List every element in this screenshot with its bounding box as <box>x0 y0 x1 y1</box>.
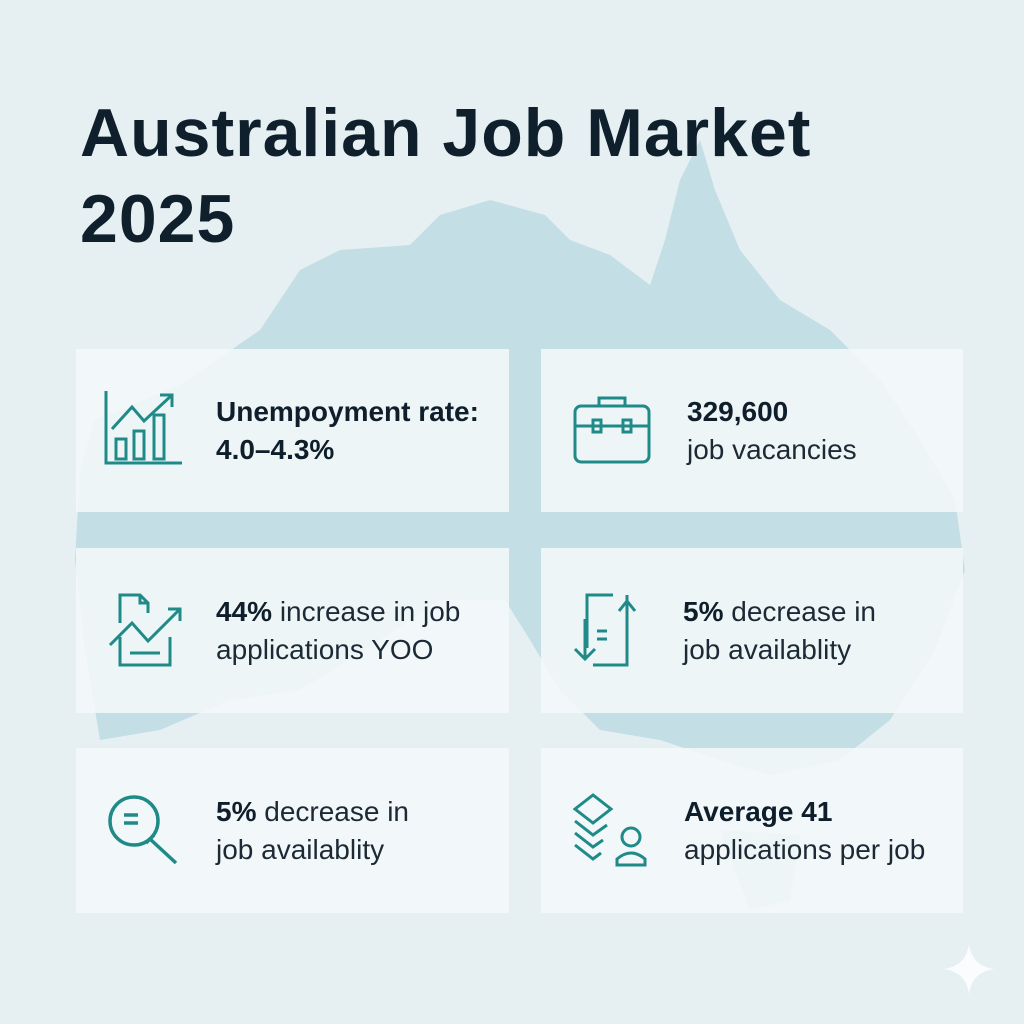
icon: briefcase <box>574 396 650 464</box>
icon: stack with person <box>573 793 646 866</box>
text <box>682 596 876 665</box>
text: job availablity <box>683 634 851 665</box>
text <box>216 596 460 665</box>
text: job availablity <box>216 834 384 865</box>
title <box>80 95 811 257</box>
panel: average applications <box>541 748 963 913</box>
text <box>216 396 479 465</box>
panel: unemployment <box>76 349 509 512</box>
text <box>215 796 409 865</box>
panel: applications increase <box>76 548 509 713</box>
text: job vacancies <box>687 434 857 465</box>
panel: vacancies <box>541 349 963 512</box>
text <box>686 396 857 465</box>
text: Average 41 <box>684 796 832 827</box>
icon: magnifier <box>108 795 178 864</box>
title: 2025 <box>80 181 235 257</box>
icon: sparkle <box>945 945 993 993</box>
title: Australian Job Market <box>80 95 811 171</box>
text: 4.0–4.3% <box>216 434 334 465</box>
icon: bar chart <box>104 391 182 464</box>
text: 5% decrease in <box>216 796 409 827</box>
text: 44% increase in job <box>216 596 460 627</box>
text: Unempoyment rate: <box>216 396 479 427</box>
text: 5% decrease in <box>683 596 876 627</box>
icon: document trend <box>109 594 182 666</box>
text: applications per job <box>684 834 925 865</box>
panel: search availability <box>76 748 509 913</box>
text: applications YOO <box>216 634 433 665</box>
icon: up/down arrows <box>574 594 636 666</box>
text <box>684 796 925 865</box>
panel: availability decrease <box>541 548 963 713</box>
text: 329,600 <box>687 396 788 427</box>
